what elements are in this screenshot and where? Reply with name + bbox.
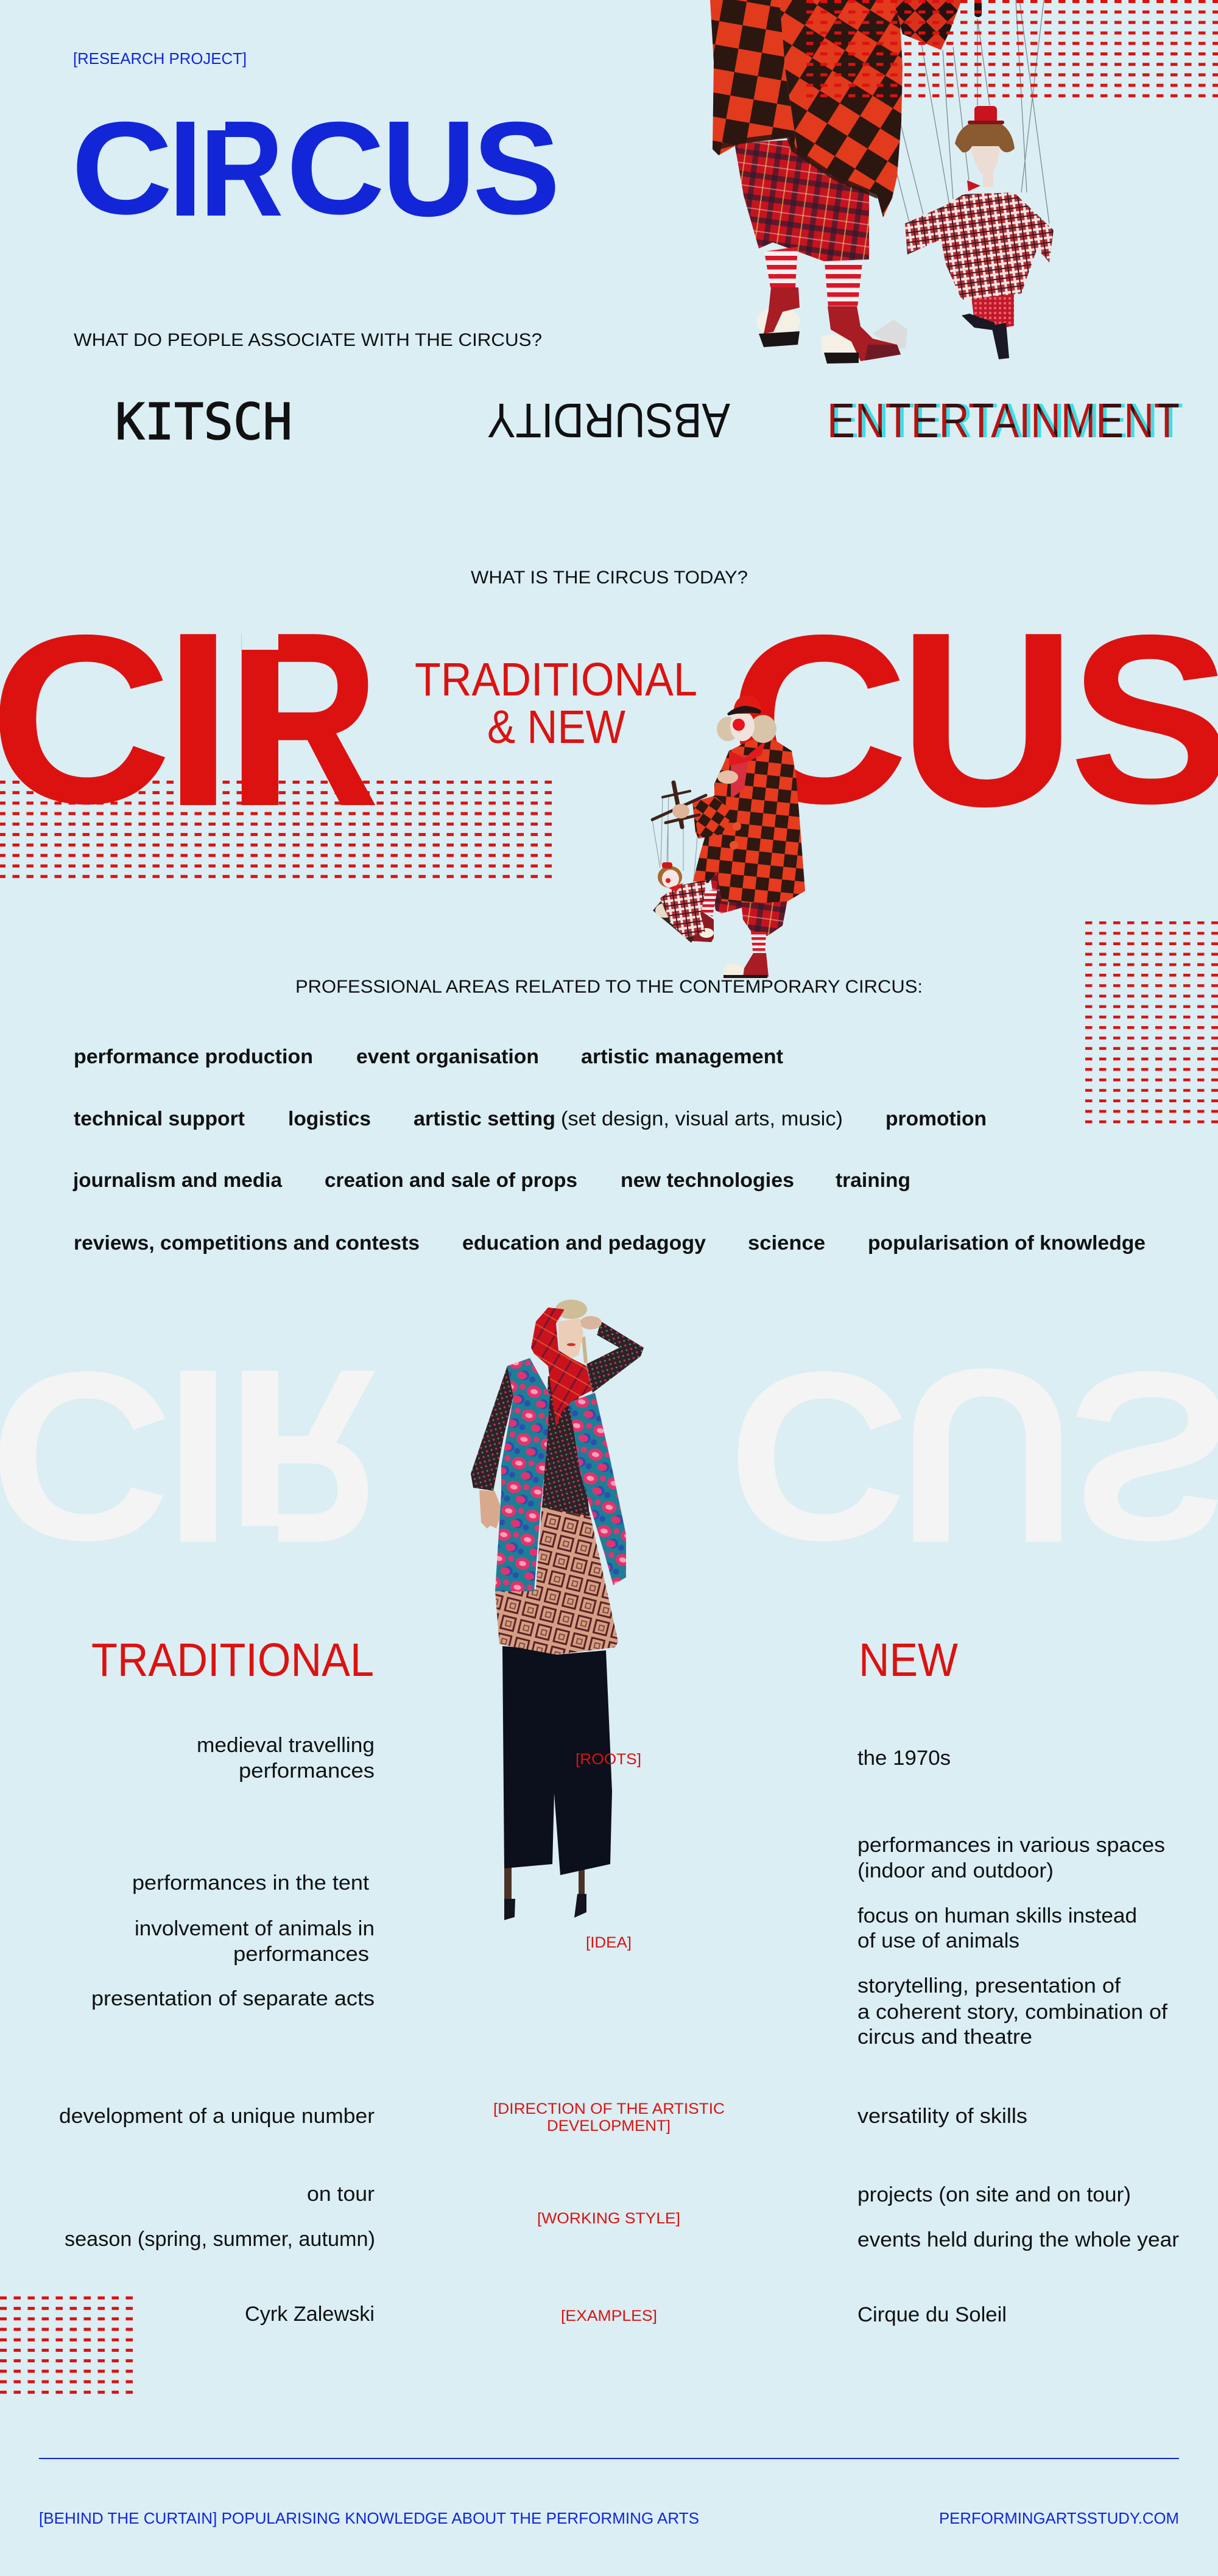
left hand: [479, 1490, 502, 1529]
left shoe: [756, 287, 800, 347]
big red letters: CIR: I: [164, 581, 233, 858]
nose: [733, 719, 745, 731]
idea: various spaces: performances in various spaces: [857, 1834, 1165, 1857]
blouse: [542, 1376, 590, 1516]
dot pattern: middle left: [0, 782, 552, 876]
heading: professional areas: PROFESSIONAL AREAS RELATED TO THE CONTEMPORARY CIRCUS:: [295, 977, 923, 997]
title: CIRCUS: S: [473, 94, 560, 242]
list row 3: creation and sale of props: [325, 1169, 577, 1191]
new column text: [857, 1747, 1179, 2326]
control bar strings: [652, 795, 699, 889]
idea: human skills: [857, 1904, 1137, 1952]
ghost letters: mirrored CUS: [728, 1318, 1218, 1596]
list row 3: new technologies: [621, 1169, 794, 1191]
list row 4: science: [748, 1231, 825, 1254]
idea: tent: performances in the tent: [132, 1871, 370, 1895]
face: [558, 1318, 583, 1359]
idea: animals: involvement of animals in: [135, 1917, 375, 1940]
word: kitsch: KITSCH: [115, 393, 292, 451]
working style: on tour: on tour: [307, 2183, 375, 2206]
list row 4: [74, 1231, 1146, 1254]
idea: storytelling: [857, 1974, 1168, 2049]
hand holding control: [672, 804, 689, 818]
standing shoe: [723, 953, 769, 978]
marionette neck and face: [967, 144, 1000, 191]
title: CIRCUS: I: [168, 93, 203, 245]
hat: [727, 695, 761, 716]
clown coat: right panel: [780, 0, 903, 217]
title: CIRCUS: C: [71, 95, 173, 242]
trousers: [502, 1646, 612, 1875]
roots: traditional: performances: [239, 1759, 375, 1782]
list row 2: [74, 1107, 987, 1130]
big red letters: CUS: [728, 580, 1218, 858]
label: working style: [WORKING STYLE]: [537, 2210, 680, 2227]
image: clown legs and marionette: [710, 0, 1054, 364]
row labels: [493, 1751, 725, 2324]
clown hand: [974, 0, 982, 17]
raised hand: [580, 1316, 602, 1329]
headscarf: [531, 1307, 592, 1427]
footer: website: PERFORMINGARTSSTUDY.COM: [939, 2509, 1179, 2527]
list row 1: artistic management: [581, 1045, 783, 1068]
list row 3: [72, 1169, 910, 1191]
raised sock: [699, 889, 717, 917]
image: woman on stilts: [471, 1300, 644, 1920]
title: CIRCUS: [71, 93, 560, 245]
big red letters: CUS: C: [728, 585, 909, 854]
clown coat: left panel: [710, 0, 798, 155]
idea: animals: performances: [233, 1943, 369, 1966]
traditional column text: [59, 1734, 375, 2326]
shirt front: [731, 755, 749, 799]
bow tie: [729, 740, 766, 766]
question: associations: WHAT DO PEOPLE ASSOCIATE WITH THE CIRCUS?: [74, 330, 542, 350]
left vest panel: [495, 1358, 550, 1591]
idea: storytelling: storytelling, presentation of: [857, 1974, 1121, 1997]
list row 3: training: [836, 1169, 910, 1191]
hand on chest: [717, 770, 738, 784]
dot pattern: bottom left: [0, 2298, 133, 2392]
dot pattern: middle right: [1085, 923, 1218, 1122]
working style: events: events held during the whole year: [857, 2228, 1179, 2251]
hair: [555, 1300, 587, 1363]
stilt feet: [504, 1894, 586, 1920]
raised shoe: [688, 910, 714, 942]
ghost letters: mirrored CUS: U: [898, 1318, 1076, 1596]
coat hem: [714, 135, 878, 196]
big red letters: CIR: [0, 581, 379, 858]
list row 2: (set design, visual arts, music): [561, 1107, 843, 1130]
idea: human skills: focus on human skills instead: [857, 1904, 1137, 1927]
direction: unique number: development of a unique number: [59, 2105, 375, 2128]
coat arm: [893, 0, 962, 50]
title: CIRCUS: U: [382, 93, 476, 245]
big red letters: CUS: U: [898, 580, 1076, 858]
heading: traditional and new: & NEW: [487, 701, 625, 753]
sleeve: [692, 796, 734, 839]
marionette feet: [962, 314, 1009, 359]
lips: [567, 1343, 576, 1346]
working style: season: season (spring, summer, autumn): [65, 2228, 375, 2251]
marionette control: [652, 783, 706, 827]
list row 4: popularisation of knowledge: [868, 1231, 1146, 1254]
list row 2: logistics: [288, 1107, 371, 1130]
right shoe: [821, 306, 907, 364]
heading: traditional column: TRADITIONAL: [91, 1634, 374, 1686]
ghost letters: mirrored CUS: C: [728, 1322, 909, 1591]
label: idea: [IDEA]: [586, 1934, 632, 1951]
ghost letters: mirrored CIR: I: [164, 1318, 233, 1595]
idea: storytelling: circus and theatre: [857, 2025, 1032, 2049]
idea: various spaces: (indoor and outdoor): [857, 1859, 1054, 1882]
label: research project: [RESEARCH PROJECT]: [73, 49, 247, 68]
marionette strings: [897, 0, 1049, 223]
title: CIRCUS: C: [286, 94, 385, 242]
roots: new: the 1970s: [857, 1747, 951, 1770]
ghost letters: mirrored CIR: R: [228, 1318, 379, 1595]
roots: traditional: medieval travelling: [197, 1734, 375, 1757]
working style: projects: projects (on site and on tour): [857, 2183, 1131, 2206]
list row 2: technical support: [74, 1107, 245, 1130]
word: absurdity upside down: ABSURDITY: [487, 393, 730, 448]
examples: cyrk zalewski: Cyrk Zalewski: [245, 2303, 375, 2326]
list row 4: education and pedagogy: [462, 1231, 706, 1254]
list row 1: performance production: [74, 1045, 313, 1068]
list row 2: artistic setting: [414, 1107, 555, 1130]
ghost letters: mirrored CIR: [0, 1318, 379, 1595]
marionette jacket: [905, 192, 1054, 300]
hair: [717, 715, 776, 743]
marionette trousers: [971, 290, 1014, 329]
dot pattern: top right: [806, 1, 1218, 96]
marionette hat: [968, 106, 1004, 124]
idea: animals: [135, 1917, 375, 1966]
idea: storytelling: a coherent story, combination of: [857, 2001, 1168, 2024]
coat: [692, 738, 805, 903]
trousers: [709, 865, 787, 936]
label: roots: [ROOTS]: [576, 1751, 641, 1768]
title: CIRCUS: R: [200, 93, 284, 245]
stilts: [504, 1863, 585, 1900]
list row 3: journalism and media: [72, 1169, 283, 1191]
label: direction of artistic development: [DIRECTION OF THE ARTISTIC: [493, 2100, 725, 2117]
marionette hair: [955, 119, 1015, 152]
image: clown with marionette: [652, 695, 805, 978]
right vest panel: [568, 1393, 626, 1585]
small puppet: [653, 862, 706, 943]
label: examples: [EXAMPLES]: [561, 2307, 657, 2324]
label: direction of artistic development: DEVELOPMENT]: [547, 2117, 671, 2134]
idea: separate acts: presentation of separate acts: [91, 1987, 375, 2010]
big red letters: CIR: R: [228, 581, 379, 858]
heading: traditional and new: [415, 653, 697, 753]
idea: various spaces: [857, 1834, 1165, 1882]
list row 1: event organisation: [356, 1045, 539, 1068]
face: [730, 711, 755, 741]
heading: traditional and new: TRADITIONAL: [415, 653, 697, 706]
footer: tagline: [BEHIND THE CURTAIN] POPULARISING KNOWLEDGE ABOUT THE PERFORMING ARTS: [39, 2509, 699, 2527]
list row 1: [74, 1045, 783, 1068]
skirt: [495, 1504, 618, 1655]
right sleeve: [586, 1321, 644, 1393]
idea: human skills: of use of animals: [857, 1929, 1019, 1952]
heading: new column: NEW: [859, 1634, 958, 1686]
clown socks: [764, 247, 862, 308]
label: direction of artistic development: [493, 2100, 725, 2134]
list row 4: reviews, competitions and contests: [74, 1231, 420, 1254]
left sleeve: [471, 1366, 513, 1491]
question: what is the circus today: WHAT IS THE CIRCUS TODAY?: [471, 568, 748, 588]
clown trousers: [734, 140, 869, 261]
standing sock: [751, 932, 766, 957]
examples: cirque du soleil: Cirque du Soleil: [857, 2303, 1007, 2326]
roots: traditional: [197, 1734, 375, 1782]
buttons: [730, 822, 741, 850]
list row 2: promotion: [885, 1107, 987, 1130]
direction: versatility: versatility of skills: [857, 2105, 1027, 2128]
